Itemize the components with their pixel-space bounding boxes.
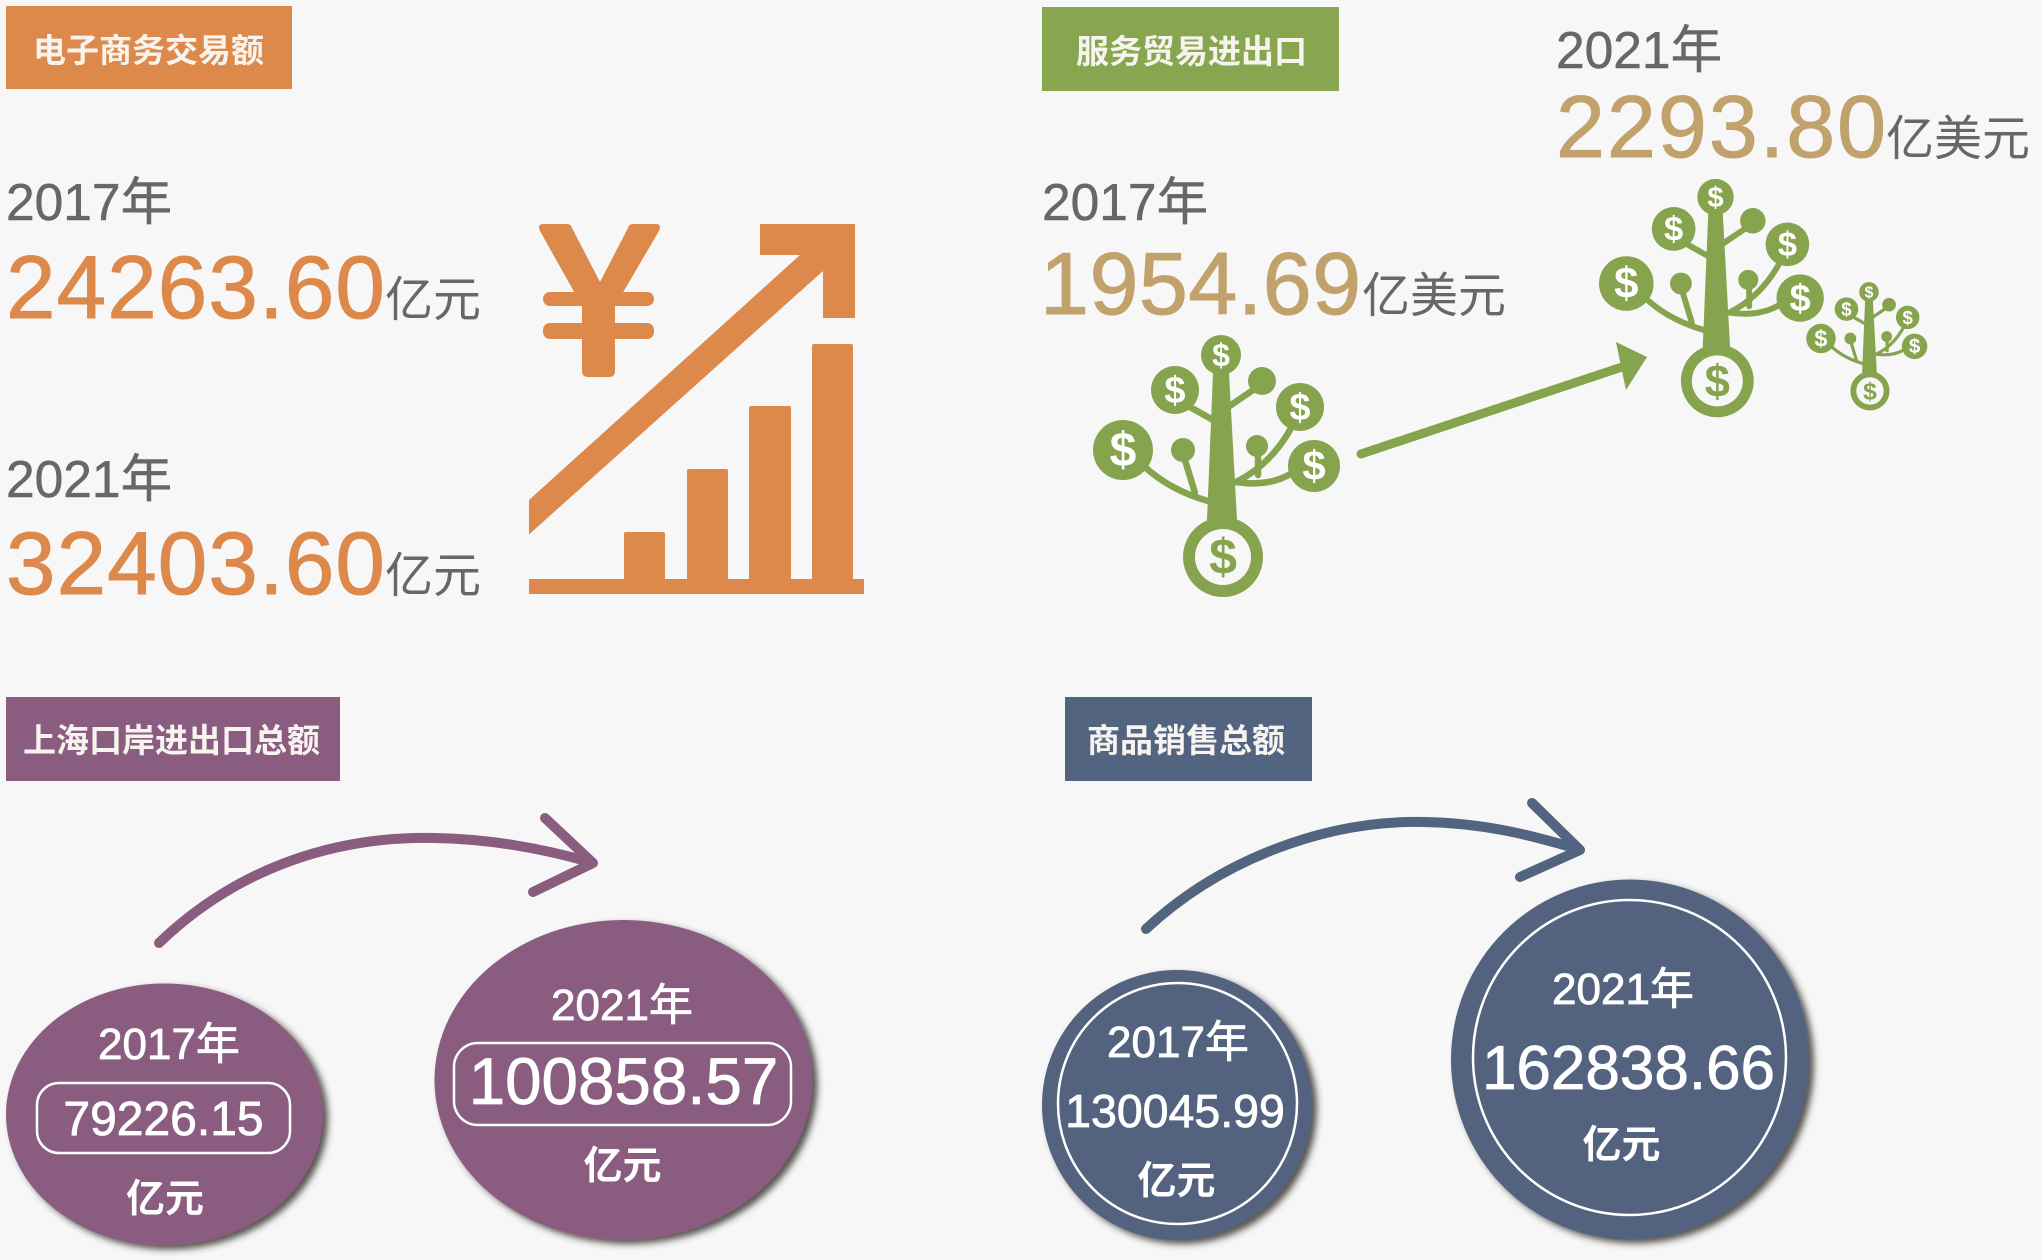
- icon: money tree 2021: $: [1790, 277, 1811, 320]
- text block: 2017 services value: 亿美元: [1362, 270, 1506, 323]
- text block: 2017 e-commerce value: 24263.60: [6, 237, 386, 337]
- circle: sales 2021: 2021年: [1552, 965, 1694, 1014]
- icon: money tree 2021: $: [1705, 355, 1730, 406]
- icon: small money tree: $: [1865, 284, 1874, 301]
- icon: rising arrow: [529, 224, 855, 534]
- arrow: services growth: [1361, 342, 1647, 454]
- circle: sales 2021: 162838.66: [1482, 1034, 1775, 1103]
- circle: port 2021: 2021年: [551, 981, 693, 1030]
- circle: port 2017: 79226.15: [63, 1093, 264, 1146]
- heading: e-commerce: [6, 6, 292, 89]
- circle: port 2021: [434, 920, 812, 1240]
- icon: money tree 2017: $: [1164, 370, 1186, 412]
- heading: trade in services: 服务贸易进出口: [1076, 33, 1307, 70]
- circle: port 2017: [6, 984, 323, 1246]
- heading: Shanghai port: [6, 697, 340, 781]
- text block: 2021 services value: 2021年: [1556, 21, 1722, 79]
- text block: 2017 e-commerce value: 2017年: [6, 173, 172, 231]
- text block: 2021 e-commerce value: [6, 450, 481, 613]
- arrow: port growth: [159, 818, 593, 943]
- panel: total commodity sales: [1042, 697, 1809, 1240]
- text block: 2021 services value: 2293.80: [1556, 77, 1888, 176]
- heading: trade in services: [1042, 7, 1339, 91]
- panel: e-commerce transaction volume: [6, 6, 864, 613]
- circle: sales 2017: 2017年: [1107, 1018, 1249, 1067]
- icon: money tree 2017: $: [1209, 529, 1237, 585]
- text block: 2021 services value: [1556, 21, 2030, 176]
- heading: Shanghai port: 上海口岸进出口总额: [23, 722, 320, 759]
- panel: Shanghai port import and export total: [6, 697, 812, 1246]
- icon: money tree 2021: $: [1778, 226, 1797, 264]
- heading: commodity sales: [1065, 697, 1312, 781]
- circle: sales 2017: [1042, 970, 1312, 1240]
- text block: 2017 e-commerce value: [6, 173, 481, 337]
- icon: money tree 2021: $: [1664, 211, 1683, 249]
- circle: port 2017: 2017年: [98, 1020, 240, 1069]
- icon: yen sign: [539, 224, 660, 377]
- icon: money tree 2017: $: [1110, 424, 1137, 477]
- icon: money tree 2017: $: [1212, 337, 1230, 373]
- circle: sales 2021: 亿元: [1582, 1124, 1661, 1167]
- icon: small money tree: [1806, 282, 1927, 411]
- text block: 2021 e-commerce value: 2021年: [6, 450, 172, 508]
- heading: e-commerce: 电子商务交易额: [33, 32, 264, 69]
- text block: 2021 e-commerce value: 亿元: [385, 550, 481, 603]
- text block: 2021 e-commerce value: 32403.60: [6, 513, 386, 613]
- circle: port 2021: 100858.57: [469, 1045, 778, 1118]
- icon: money tree 2021: $: [1614, 259, 1638, 308]
- text block: 2017 services value: 1954.69: [1040, 234, 1362, 333]
- panel: trade in services: [1040, 7, 2030, 597]
- circle: sales 2021: [1451, 880, 1809, 1240]
- text block: 2017 services value: 2017年: [1042, 173, 1208, 231]
- icon: small money tree: $: [1903, 307, 1914, 328]
- icon: money tree 2017: [1093, 335, 1340, 597]
- arrow: sales growth: [1146, 803, 1580, 929]
- heading: commodity sales: 商品销售总额: [1087, 722, 1285, 759]
- icon: money tree 2021: [1599, 179, 1824, 417]
- icon: small money tree: $: [1841, 298, 1852, 319]
- icon: small money tree: $: [1814, 325, 1828, 351]
- icon: money tree 2021: $: [1707, 182, 1724, 214]
- text block: 2017 services value: [1040, 173, 1506, 333]
- icon: growth bars: [529, 344, 864, 594]
- icon: small money tree: $: [1909, 335, 1921, 358]
- icon: money tree 2017: $: [1302, 442, 1326, 489]
- circle: sales 2017: 亿元: [1137, 1160, 1216, 1203]
- text block: 2017 e-commerce value: 亿元: [385, 274, 481, 327]
- icon: small money tree: $: [1863, 378, 1877, 405]
- icon: money tree 2017: $: [1289, 387, 1311, 429]
- text block: 2021 services value: 亿美元: [1886, 113, 2030, 166]
- circle: port 2017: 亿元: [126, 1178, 204, 1221]
- circle: sales 2017: 130045.99: [1065, 1085, 1285, 1137]
- circle: port 2021: 亿元: [583, 1145, 662, 1188]
